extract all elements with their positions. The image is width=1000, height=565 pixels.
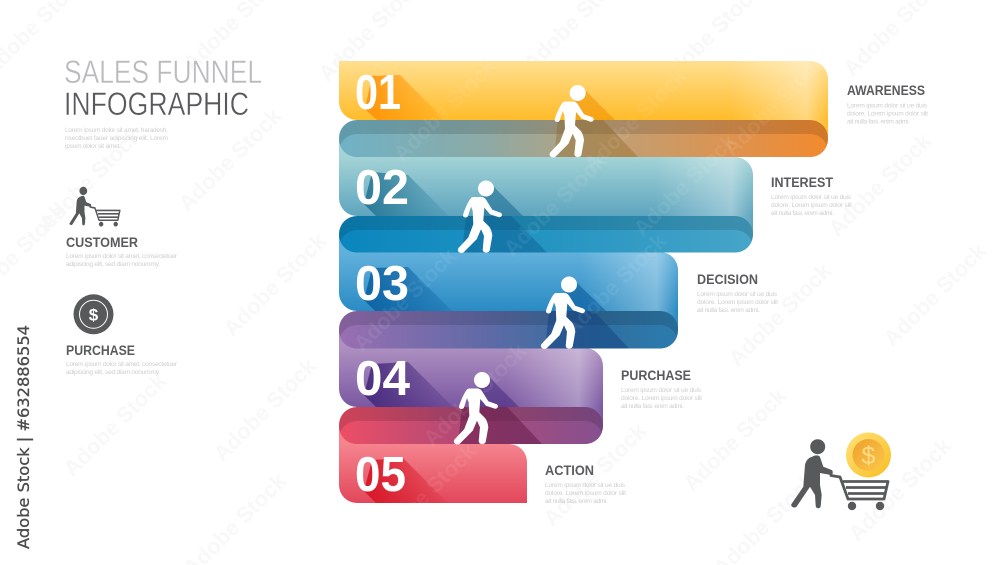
label: interest: dolore. Lorem ipsum dolor slit <box>771 202 852 209</box>
watermark overlay: Adobe Stock <box>498 148 612 261</box>
label: awareness: Lorem ipsum dolor sit ue duis <box>847 102 928 110</box>
watermark overlay: Adobe Stock <box>718 48 832 161</box>
purchase text: Lorem ipsum dolor sit amet, consectetuer <box>66 361 178 368</box>
title: SALES FUNNEL <box>64 54 262 90</box>
label: awareness <box>847 83 928 126</box>
person shadows on bands <box>458 120 638 444</box>
label: action: dolore. Lorem ipsum dolor slit <box>545 490 626 497</box>
title: INFOGRAPHIC <box>64 86 249 122</box>
watermark layer: Adobe Stock <box>58 368 172 481</box>
label: interest: Lorem ipsum dolor sit ue duis <box>771 194 852 201</box>
watermark overlay: Adobe Stock <box>368 438 482 551</box>
icon: dollar coin <box>74 294 114 334</box>
customer text: Lorem ipsum dolor sit amet, consectetuer <box>66 253 178 260</box>
title <box>64 54 262 122</box>
label: purchase: dolore. Lorem ipsum dolor slit <box>621 395 702 402</box>
band 2 <box>339 216 753 252</box>
label: purchase: PURCHASE <box>621 368 691 383</box>
panel 5 <box>339 427 527 503</box>
panel 1 <box>339 61 828 140</box>
label: action: ACTION <box>545 463 594 478</box>
title description: ipsum dolor sit amet. <box>65 143 121 150</box>
title description: Lorem ipsum dolor sit amet, haradesh, <box>65 127 168 134</box>
purchase text: adipiscing elit, sed diam nonummy. <box>66 369 160 376</box>
purchase text: PURCHASE <box>66 343 135 358</box>
watermark layer: Adobe Stock <box>33 123 147 236</box>
watermark layer: Adobe Stock <box>843 433 957 546</box>
watermark layer: Adobe Stock <box>538 418 652 531</box>
label: interest: ait nulla fasi. enim admi. <box>771 210 834 217</box>
watermark layer: Adobe Stock <box>218 228 332 341</box>
label: purchase: ait nulla fasi. enim admi. <box>621 403 684 410</box>
band 3 <box>339 311 678 348</box>
icon: shopper with coin: $ <box>862 442 876 470</box>
watermark layer: Adobe Stock <box>173 103 287 216</box>
watermark overlay <box>348 48 832 551</box>
label: decision: ait nulla fasi. enim admi. <box>697 307 760 314</box>
label: awareness: ait nulla fasi. enim admi. <box>847 118 910 126</box>
watermark overlay: Adobe Stock <box>578 63 692 176</box>
number shadows <box>364 75 453 503</box>
watermark overlay: Adobe Stock <box>418 338 532 451</box>
label: purchase: Lorem ipsum dolor sit ue duis <box>621 387 702 394</box>
watermark layer: Adobe Stock <box>878 238 992 351</box>
label: awareness: AWARENESS <box>847 83 925 98</box>
label: interest <box>771 175 852 217</box>
label: decision: DECISION <box>697 272 758 287</box>
watermark layer: Adobe Stock <box>208 353 322 466</box>
watermark layer: Adobe Stock <box>723 258 837 371</box>
panel 3 <box>339 235 678 331</box>
title description: nsectbuet fauer adipiscing elit. Lorem <box>65 135 168 142</box>
watermark layer: Adobe Stock <box>678 383 792 496</box>
band 1 <box>339 120 828 157</box>
label: action <box>545 463 626 505</box>
label: action: ait nulla fasi. enim admi. <box>545 498 608 505</box>
purchase text <box>66 343 178 376</box>
icon: customer with cart <box>70 187 120 227</box>
panel 4 <box>339 331 603 427</box>
icon: shopper with coin <box>791 432 891 510</box>
watermark overlay: Adobe Stock <box>388 53 502 166</box>
funnel chart <box>339 61 828 503</box>
numbers: 02 <box>355 161 409 215</box>
label: purchase <box>621 368 702 410</box>
customer text: CUSTOMER <box>66 235 138 250</box>
title description <box>65 127 168 150</box>
customer text: adipiscing elit, sed diam nonummy. <box>66 261 160 268</box>
walking figures <box>454 85 594 444</box>
watermark overlay: Adobe Stock <box>628 128 742 241</box>
label: interest: INTEREST <box>771 175 834 190</box>
icon: dollar coin: $ <box>89 306 99 324</box>
numbers: 05 <box>355 448 406 502</box>
label: action: Lorem ipsum dolor sit ue duis <box>545 482 626 489</box>
watermark overlay: Adobe Stock <box>348 243 462 356</box>
label: decision: dolore. Lorem ipsum dolor slit <box>697 299 778 306</box>
numbers: 01 <box>355 66 401 120</box>
panel 2 <box>339 140 753 236</box>
band 4 <box>339 407 603 444</box>
numbers: 03 <box>355 257 409 311</box>
label: decision: Lorem ipsum dolor sit ue duis <box>697 291 778 298</box>
label: awareness: dolore. Lorem ipsum dolor slit <box>847 110 928 118</box>
stock id label: Adobe Stock | #632886554 <box>14 325 33 549</box>
numbers <box>355 66 410 502</box>
watermark overlay: Adobe Stock <box>558 228 672 341</box>
watermark layer: Adobe Stock <box>823 128 937 241</box>
label: decision <box>697 272 778 314</box>
customer text <box>66 235 178 268</box>
person shadows on panels <box>478 90 615 407</box>
numbers: 04 <box>355 352 410 406</box>
